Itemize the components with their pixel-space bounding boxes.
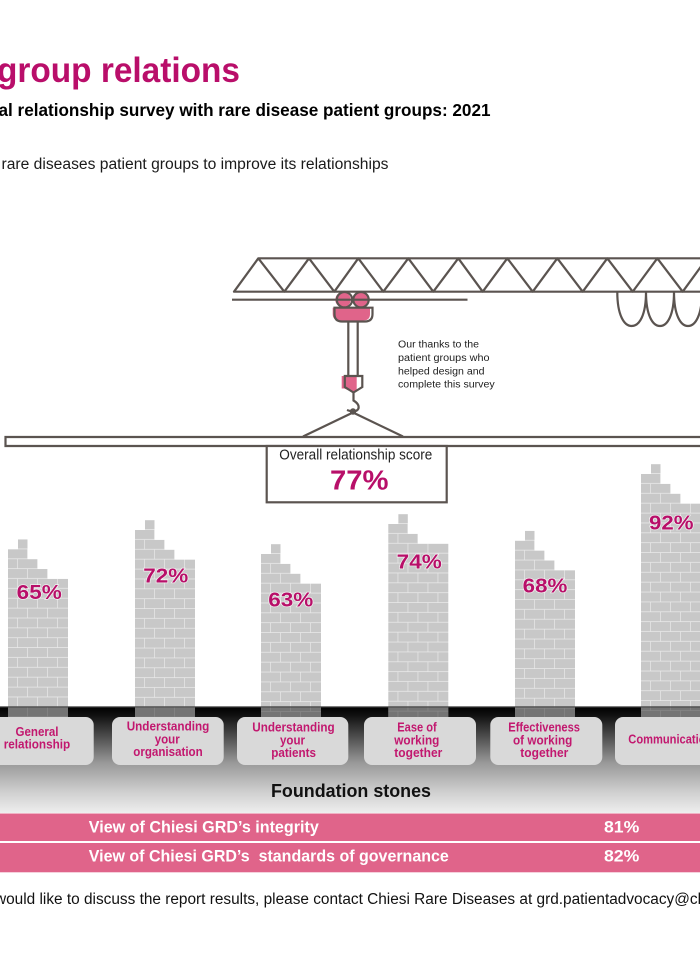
thanks note: complete this survey <box>398 380 495 391</box>
brick column 5 <box>515 531 575 717</box>
thanks note: patient groups who <box>398 353 490 364</box>
intro text: rare diseases patient groups to improve its relationships <box>2 156 389 173</box>
sling <box>303 412 403 436</box>
foundation stones heading: Foundation stones <box>271 781 431 801</box>
crane <box>232 258 700 436</box>
label: understanding your organisation: Understanding <box>127 720 209 734</box>
label: general relationship: General <box>16 725 58 739</box>
label: ease of working together: together <box>394 746 442 760</box>
percentage values: 72% <box>143 565 188 588</box>
brick column 3 <box>261 544 321 717</box>
subtitle: al relationship survey with rare disease patient groups: 2021 <box>0 100 491 120</box>
crane truss <box>234 258 700 292</box>
label: ease of working together: working <box>393 734 439 748</box>
label: effectiveness of working together: Effectiveness <box>508 721 580 735</box>
label: effectiveness of working together: together <box>520 746 568 760</box>
beam <box>6 437 700 446</box>
label: general relationship: relationship <box>4 737 71 751</box>
percentage values <box>17 511 693 612</box>
label: understanding your patients: patients <box>271 746 316 760</box>
bar: integrity: 81% <box>604 817 639 836</box>
label: understanding your patients: Understanding <box>252 721 335 735</box>
label: ease of working together <box>364 717 476 765</box>
bar: integrity <box>0 814 700 841</box>
thanks note: helped design and <box>398 366 484 377</box>
footer contact text: would like to discuss the report results, please contact Chiesi Rare Diseases at grd.patientadvocacy@cl <box>0 891 700 908</box>
brick column 4 <box>388 514 448 717</box>
percentage values: 63% <box>268 589 313 612</box>
label: general relationship <box>0 717 94 765</box>
label: effectiveness of working together: of working <box>513 734 572 748</box>
hook block <box>345 376 362 392</box>
thanks note: Our thanks to the <box>398 340 479 350</box>
overall score box <box>267 446 447 502</box>
label: understanding your organisation: your <box>155 732 180 746</box>
brick base shading <box>8 707 700 717</box>
percentage values: 68% <box>523 574 567 597</box>
trolley wheels and body <box>334 308 372 322</box>
overall score box: Overall relationship score <box>279 448 432 464</box>
label: effectiveness of working together <box>490 717 602 765</box>
percentage values: 74% <box>397 551 442 574</box>
crane rail <box>232 299 468 301</box>
bar: governance: View of Chiesi GRD’s standards of governance <box>89 847 449 866</box>
bar: governance <box>0 843 700 872</box>
label: communication <box>615 717 700 765</box>
percentage values: 92% <box>649 511 694 534</box>
overall score box: 77% <box>330 464 389 496</box>
brick column 2 <box>135 520 195 717</box>
ground gradient <box>0 707 700 813</box>
brick column 1 <box>8 539 68 717</box>
thanks note <box>398 340 495 391</box>
label: understanding your organisation: organisation <box>133 745 203 759</box>
trolley pink fill <box>333 292 370 392</box>
label: understanding your organisation <box>112 717 224 765</box>
hook <box>347 392 359 411</box>
crane scallops <box>617 292 700 326</box>
label: understanding your patients <box>237 717 348 765</box>
label: ease of working together: Ease of <box>397 721 437 735</box>
label: understanding your patients: your <box>280 733 305 747</box>
hook shaft <box>348 322 358 376</box>
title: group relations <box>0 51 240 90</box>
bar: integrity: View of Chiesi GRD’s integrity <box>89 817 319 836</box>
brick column 6 <box>641 464 700 717</box>
percentage values: 65% <box>17 581 62 604</box>
bar: governance: 82% <box>604 847 639 866</box>
